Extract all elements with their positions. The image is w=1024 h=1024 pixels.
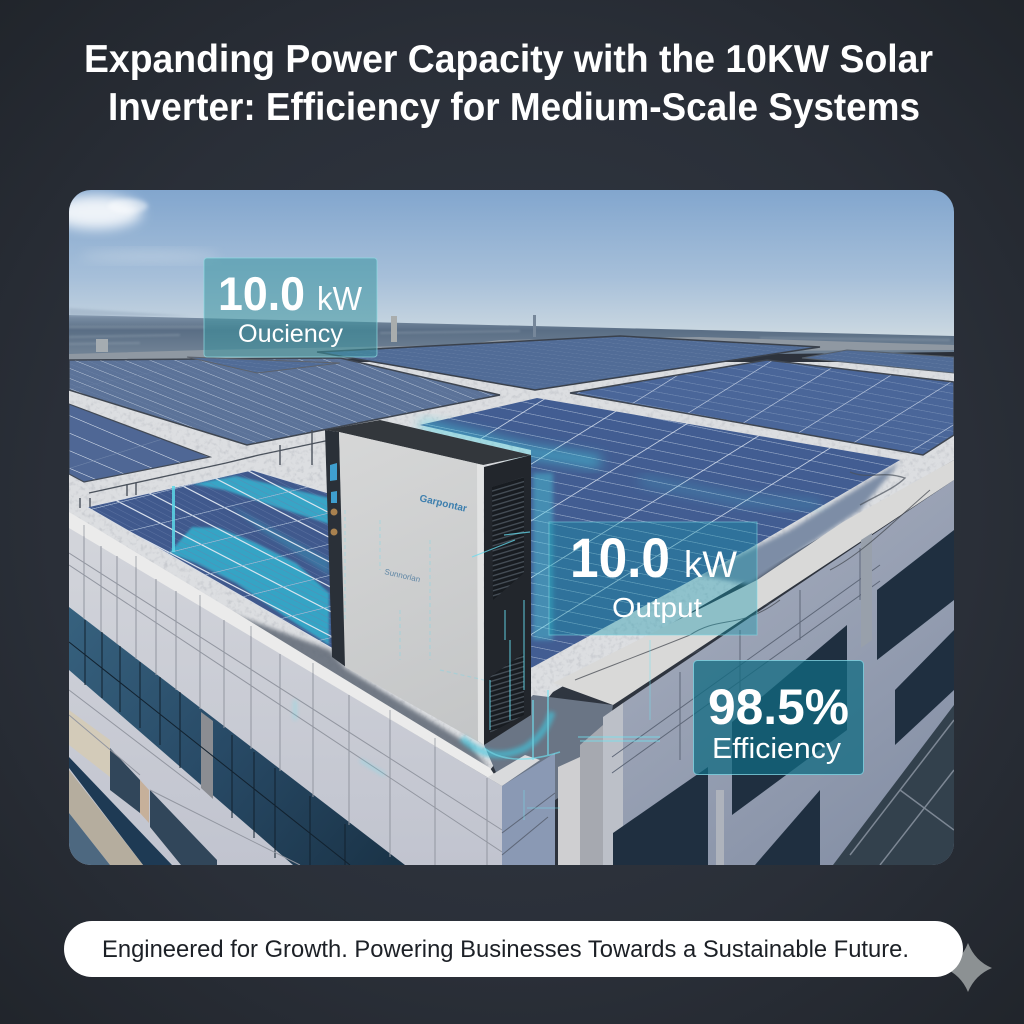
callout: 98.5% Efficiency: Efficiency [712, 733, 842, 765]
navy stripe [69, 757, 172, 865]
sky with cloud [50, 190, 954, 340]
pipes and mounting posts [80, 430, 905, 668]
lower beige wall [69, 770, 143, 865]
facade joints and drainpipe [502, 548, 880, 855]
callout: 10.0 kW Ouciency: kW [317, 280, 363, 317]
corner cap [488, 755, 540, 786]
callout: 10.0 kW Ouciency: 10.0 [218, 267, 305, 320]
title: Inverter: Efficiency for Medium-Scale Systems [108, 86, 920, 129]
callout: 10.0 kW Output: 10.0 [570, 526, 670, 589]
middle window band [110, 748, 217, 865]
tagline pill: Engineered for Growth. Powering Businesses Towards a Sustainable Future. [102, 936, 909, 963]
upper vent [492, 477, 524, 600]
roof deck [69, 362, 954, 770]
under-panel shadow [700, 462, 900, 585]
top face [325, 420, 531, 465]
grey pillar [201, 712, 213, 799]
cyan hologram glow on left array [169, 476, 329, 645]
callout: 10.0 kW Ouciency: Ouciency [238, 320, 343, 348]
solar array: lower left edge [69, 404, 210, 482]
hologram traces [345, 510, 530, 730]
solar array: right [570, 360, 954, 455]
cyan hologram glow on centre panels [172, 425, 820, 640]
callout: 10.0 kW Output: Output [612, 592, 702, 623]
callout: 10.0 kW Output [549, 522, 757, 635]
title [84, 38, 933, 129]
beige cladding [69, 710, 110, 777]
building left facade [69, 512, 502, 865]
solar array: upper left [69, 358, 500, 445]
solar array: centre [420, 398, 900, 668]
left array grid lines [87, 470, 335, 650]
lower windows [69, 813, 110, 865]
front panel [339, 432, 484, 745]
corner dark recess [484, 695, 613, 800]
corner face [502, 753, 555, 865]
solar array: left of inverter, base [87, 470, 335, 650]
brand label lower: Sunnorlan [384, 567, 421, 584]
brand label upper: Garpontar [418, 493, 468, 515]
solar array: far right [802, 350, 954, 373]
callout: 10.0 kW Output: kW [684, 544, 737, 585]
grimy roof edge [234, 612, 490, 768]
accent panel [140, 780, 149, 823]
callout: 98.5% Efficiency [694, 660, 864, 774]
dark lower scaffold [833, 705, 954, 865]
parapet grime and cables [575, 490, 930, 680]
solar array: small rear left [187, 357, 340, 373]
distant city horizon [69, 308, 954, 364]
tagline pill [64, 921, 963, 977]
parapet top strip [553, 460, 954, 705]
facade windows [613, 530, 954, 865]
callout: 98.5% Efficiency: 98.5% [708, 679, 849, 735]
building right facade [484, 460, 954, 865]
left dark strip with display [325, 430, 346, 667]
cladding joints [69, 536, 502, 865]
panel: rooftop photo scene [50, 190, 954, 865]
title: Expanding Power Capacity with the 10KW Solar [84, 38, 933, 81]
parapet top strip [69, 512, 502, 786]
mullions [69, 620, 350, 865]
icon: sparkle star [944, 943, 992, 992]
right dark side [484, 455, 531, 745]
callout: 10.0 kW Ouciency [204, 258, 377, 357]
lower vent [490, 653, 524, 733]
inverter unit [325, 420, 531, 745]
white column [558, 757, 580, 865]
roof deck speckle [69, 362, 954, 770]
cyan hologram lines on roof [295, 640, 660, 820]
solar array: top centre [317, 336, 820, 390]
upper window band [69, 607, 405, 865]
